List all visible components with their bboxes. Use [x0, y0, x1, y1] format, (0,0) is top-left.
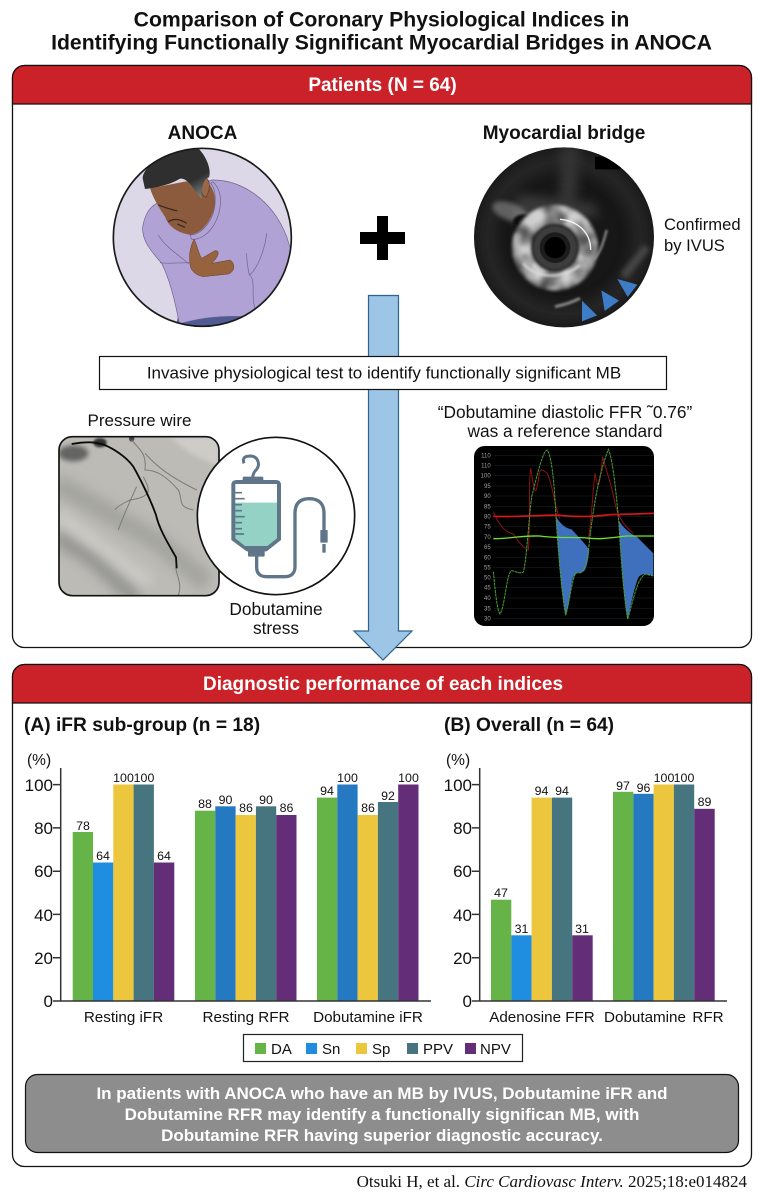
arrow: flow down to results	[354, 296, 412, 660]
callout: invasive physiological test: Invasive physiological test to identify functionally significant MB	[147, 364, 621, 382]
Resting iFR bars	[73, 771, 174, 1001]
performance header	[12, 664, 752, 703]
icon: dobutamine IV bag	[197, 437, 355, 595]
Dobutamine iFR bars: 100	[398, 771, 419, 785]
chart: pressure waveform: 80	[484, 515, 491, 521]
performance header: Diagnostic performance of each indices	[203, 674, 563, 695]
legend: Sp	[372, 1041, 390, 1058]
bar chart: overall: 0	[463, 992, 472, 1011]
icon: plus sign	[360, 216, 405, 260]
Dobutamine RFR bars: 89	[698, 795, 711, 809]
Resting RFR bars: 90	[259, 793, 273, 807]
chart: pressure waveform: 30	[484, 616, 491, 622]
chart: pressure waveform: 55	[484, 565, 491, 571]
patients header: Patients (N = 64)	[308, 75, 457, 96]
bar chart: iFR sub-group: 0	[44, 992, 53, 1011]
heading: ANOCA: ANOCA	[168, 123, 238, 144]
bar chart: iFR sub-group: 40	[34, 906, 53, 925]
Dobutamine iFR bars: 100	[337, 771, 358, 785]
title: Identifying Functionally Significant Myocardial Bridges in ANOCA	[51, 32, 712, 54]
chart: pressure waveform: 35	[484, 606, 491, 612]
chart: pressure waveform	[474, 446, 654, 626]
conclusion box	[26, 1074, 738, 1152]
legend: Sn	[322, 1041, 340, 1058]
chart: pressure waveform: 65	[484, 545, 491, 551]
conclusion box: Dobutamine RFR having superior diagnostic accuracy.	[161, 1126, 603, 1145]
bar chart: overall: 80	[453, 819, 472, 838]
chart: pressure waveform: 50	[484, 576, 491, 582]
bar chart: iFR sub-group: 60	[34, 862, 53, 881]
citation: Otsuki H, et al. Circ Cardiovasc Interv. 2025;18:e014824	[357, 1172, 747, 1191]
text: confirmed by IVUS: by IVUS	[664, 236, 725, 255]
conclusion box: In patients with ANOCA who have an MB by IVUS, Dobutamine iFR and	[96, 1084, 668, 1103]
bar chart: overall	[444, 752, 727, 1026]
Dobutamine iFR bars: 92	[381, 789, 395, 803]
Dobutamine iFR bars: 86	[361, 801, 375, 815]
text: reference standard	[438, 402, 692, 441]
bar chart: iFR sub-group: 80	[34, 819, 53, 838]
image: IVUS cross-section	[474, 147, 654, 327]
Resting RFR bars	[195, 793, 296, 1001]
bar chart: overall: Adenosine FFR	[489, 1009, 595, 1026]
title	[51, 8, 712, 54]
heading: overall: (B) Overall (n = 64)	[444, 715, 614, 736]
Adenosine FFR bars: 31	[575, 922, 589, 936]
Dobutamine RFR bars: 96	[637, 781, 650, 795]
conclusion box: Dobutamine RFR may identify a functionally significan MB, with	[125, 1105, 639, 1124]
Adenosine FFR bars: 47	[494, 886, 508, 900]
text: reference standard: “Dobutamine diastolic FFR ˜0.76”	[438, 402, 692, 422]
Adenosine FFR bars: 94	[535, 784, 548, 798]
chart: pressure waveform: 60	[484, 555, 491, 561]
Dobutamine RFR bars: 100	[654, 771, 674, 785]
panel: patients	[12, 66, 752, 660]
bar chart: overall: (%)	[446, 752, 470, 769]
chart: pressure waveform: 95	[484, 484, 491, 490]
Resting RFR bars: 90	[219, 793, 232, 807]
text: reference standard: was a reference standard	[466, 421, 663, 441]
Dobutamine iFR bars: 94	[320, 784, 334, 798]
Resting iFR bars: 78	[76, 819, 90, 833]
Adenosine FFR bars	[491, 784, 593, 1001]
bar chart: overall: 60	[453, 862, 472, 881]
chart: pressure waveform: 75	[484, 525, 491, 531]
Dobutamine RFR bars	[613, 771, 715, 1001]
chart: pressure waveform: 110	[481, 453, 491, 459]
bar chart: overall: 20	[453, 949, 472, 968]
bar chart: iFR sub-group	[25, 752, 431, 1026]
Resting iFR bars: 64	[96, 849, 110, 863]
text: confirmed by IVUS: Confirmed	[664, 215, 741, 234]
icon: patient holding chest	[113, 148, 294, 333]
legend: NPV	[480, 1041, 511, 1058]
legend: PPV	[423, 1041, 453, 1058]
text: confirmed by IVUS	[664, 215, 741, 255]
bar chart: overall: 40	[453, 906, 472, 925]
Resting iFR bars: 100	[134, 771, 154, 785]
bar chart: overall: Dobutamine	[604, 1009, 686, 1026]
chart: pressure waveform: 85	[484, 504, 491, 510]
Resting RFR bars: 86	[239, 801, 253, 815]
label: dobutamine stress	[229, 599, 323, 638]
label: pressure wire: Pressure wire	[88, 411, 191, 430]
Dobutamine RFR bars: 97	[616, 779, 630, 793]
bar chart: overall: 100	[444, 776, 472, 795]
panel: diagnostic performance	[12, 664, 752, 1166]
Dobutamine iFR bars	[317, 771, 419, 1001]
Resting iFR bars: 64	[157, 849, 171, 863]
bar chart: iFR sub-group: (%)	[27, 752, 51, 769]
Resting iFR bars: 100	[113, 771, 134, 785]
callout: invasive physiological test	[100, 356, 666, 390]
patients header	[12, 66, 752, 104]
bar chart: iFR sub-group: 100	[25, 776, 53, 795]
heading: myocardial bridge: Myocardial bridge	[483, 123, 645, 144]
chart: pressure waveform: 45	[484, 586, 491, 592]
bar chart: iFR sub-group: 20	[34, 949, 53, 968]
heading: iFR sub-group: (A) iFR sub-group (n = 18)	[24, 715, 260, 736]
chart: pressure waveform: 110	[481, 464, 491, 470]
Adenosine FFR bars: 94	[555, 784, 569, 798]
bar chart: iFR sub-group: Resting RFR	[203, 1009, 289, 1026]
Resting RFR bars: 86	[280, 801, 293, 815]
chart: pressure waveform: 70	[484, 535, 491, 541]
label: dobutamine stress: Dobutamine	[229, 599, 323, 619]
legend: DA	[271, 1041, 292, 1058]
Resting RFR bars: 88	[198, 797, 212, 811]
legend	[244, 1034, 522, 1062]
chart: pressure waveform: 40	[484, 596, 491, 602]
label: dobutamine stress: stress	[253, 618, 299, 638]
chart: pressure waveform: 90	[484, 494, 491, 500]
bar chart: iFR sub-group: Dobutamine iFR	[313, 1009, 423, 1026]
image: angiogram with pressure wire	[57, 435, 219, 600]
bar chart: iFR sub-group: Resting iFR	[84, 1009, 163, 1026]
Adenosine FFR bars: 31	[515, 922, 528, 936]
title: Comparison of Coronary Physiological Indices in	[134, 8, 629, 32]
chart: pressure waveform: 100	[481, 474, 491, 480]
Dobutamine RFR bars: 100	[674, 771, 694, 785]
bar chart: overall: RFR	[692, 1009, 724, 1026]
